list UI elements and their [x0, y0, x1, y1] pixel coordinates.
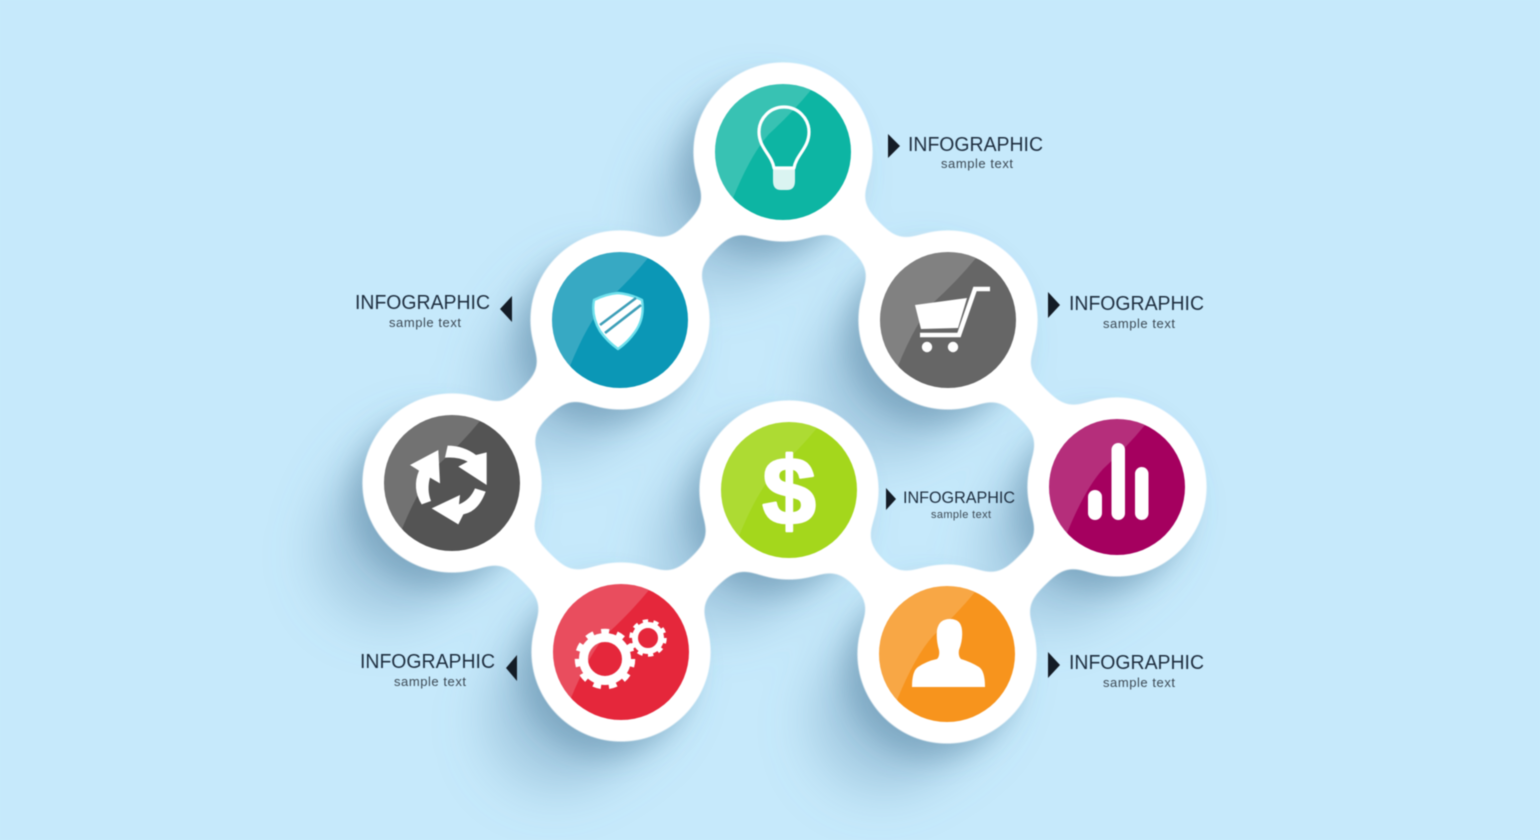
icon: bar chart: [1088, 443, 1148, 520]
label: cart: [1048, 292, 1204, 331]
sample text: sample text: [941, 156, 1013, 171]
node: person: [879, 586, 1015, 722]
arrow: [506, 655, 517, 681]
orange disc: [879, 586, 1015, 722]
node: shield: [552, 252, 688, 388]
node: dollar: [721, 422, 857, 558]
long drop shadows: [310, 80, 1191, 801]
sample text: sample text: [1103, 675, 1175, 690]
heading: INFOGRAPHIC: [1069, 293, 1204, 315]
sample text: sample text: [1103, 316, 1175, 331]
heading: INFOGRAPHIC: [360, 651, 495, 673]
node: shopping cart: [880, 252, 1016, 388]
label: gears: [360, 651, 517, 689]
arrow: [500, 296, 512, 322]
node: recycle arrows: [384, 415, 520, 551]
icon: person silhouette: [912, 619, 985, 687]
node: light bulb: [715, 84, 851, 220]
heading: INFOGRAPHIC: [908, 134, 1043, 156]
dark gray disc: [384, 415, 520, 551]
icon: shopping cart: [915, 289, 990, 352]
green disc: [721, 422, 857, 558]
icon: light bulb: [759, 107, 809, 190]
arrow: [886, 488, 896, 510]
heading: INFOGRAPHIC: [903, 488, 1015, 507]
icon: dollar sign: $: [762, 438, 816, 545]
sample text: sample text: [931, 509, 991, 521]
teal disc: [715, 84, 851, 220]
label: bulb: [888, 134, 1043, 171]
node: bar chart: [1049, 419, 1185, 555]
label: shield: [355, 292, 512, 330]
arrow: [1048, 292, 1060, 318]
label: dollar: [886, 488, 1015, 521]
magenta disc: [1049, 419, 1185, 555]
icon: recycle arrows: [410, 446, 487, 524]
node: gears: [553, 584, 689, 720]
sample text: sample text: [389, 315, 461, 330]
arrow: [1048, 652, 1060, 678]
white connected ring network: [363, 63, 1206, 743]
label: person: [1048, 652, 1204, 690]
heading: INFOGRAPHIC: [1069, 652, 1204, 674]
heading: INFOGRAPHIC: [355, 292, 490, 314]
icon: gears: [578, 621, 665, 686]
sample text: sample text: [394, 674, 466, 689]
red disc: [553, 584, 689, 720]
icon: shield: [593, 293, 643, 349]
arrow: [888, 134, 900, 158]
gray disc: [880, 252, 1016, 388]
blue disc: [552, 252, 688, 388]
